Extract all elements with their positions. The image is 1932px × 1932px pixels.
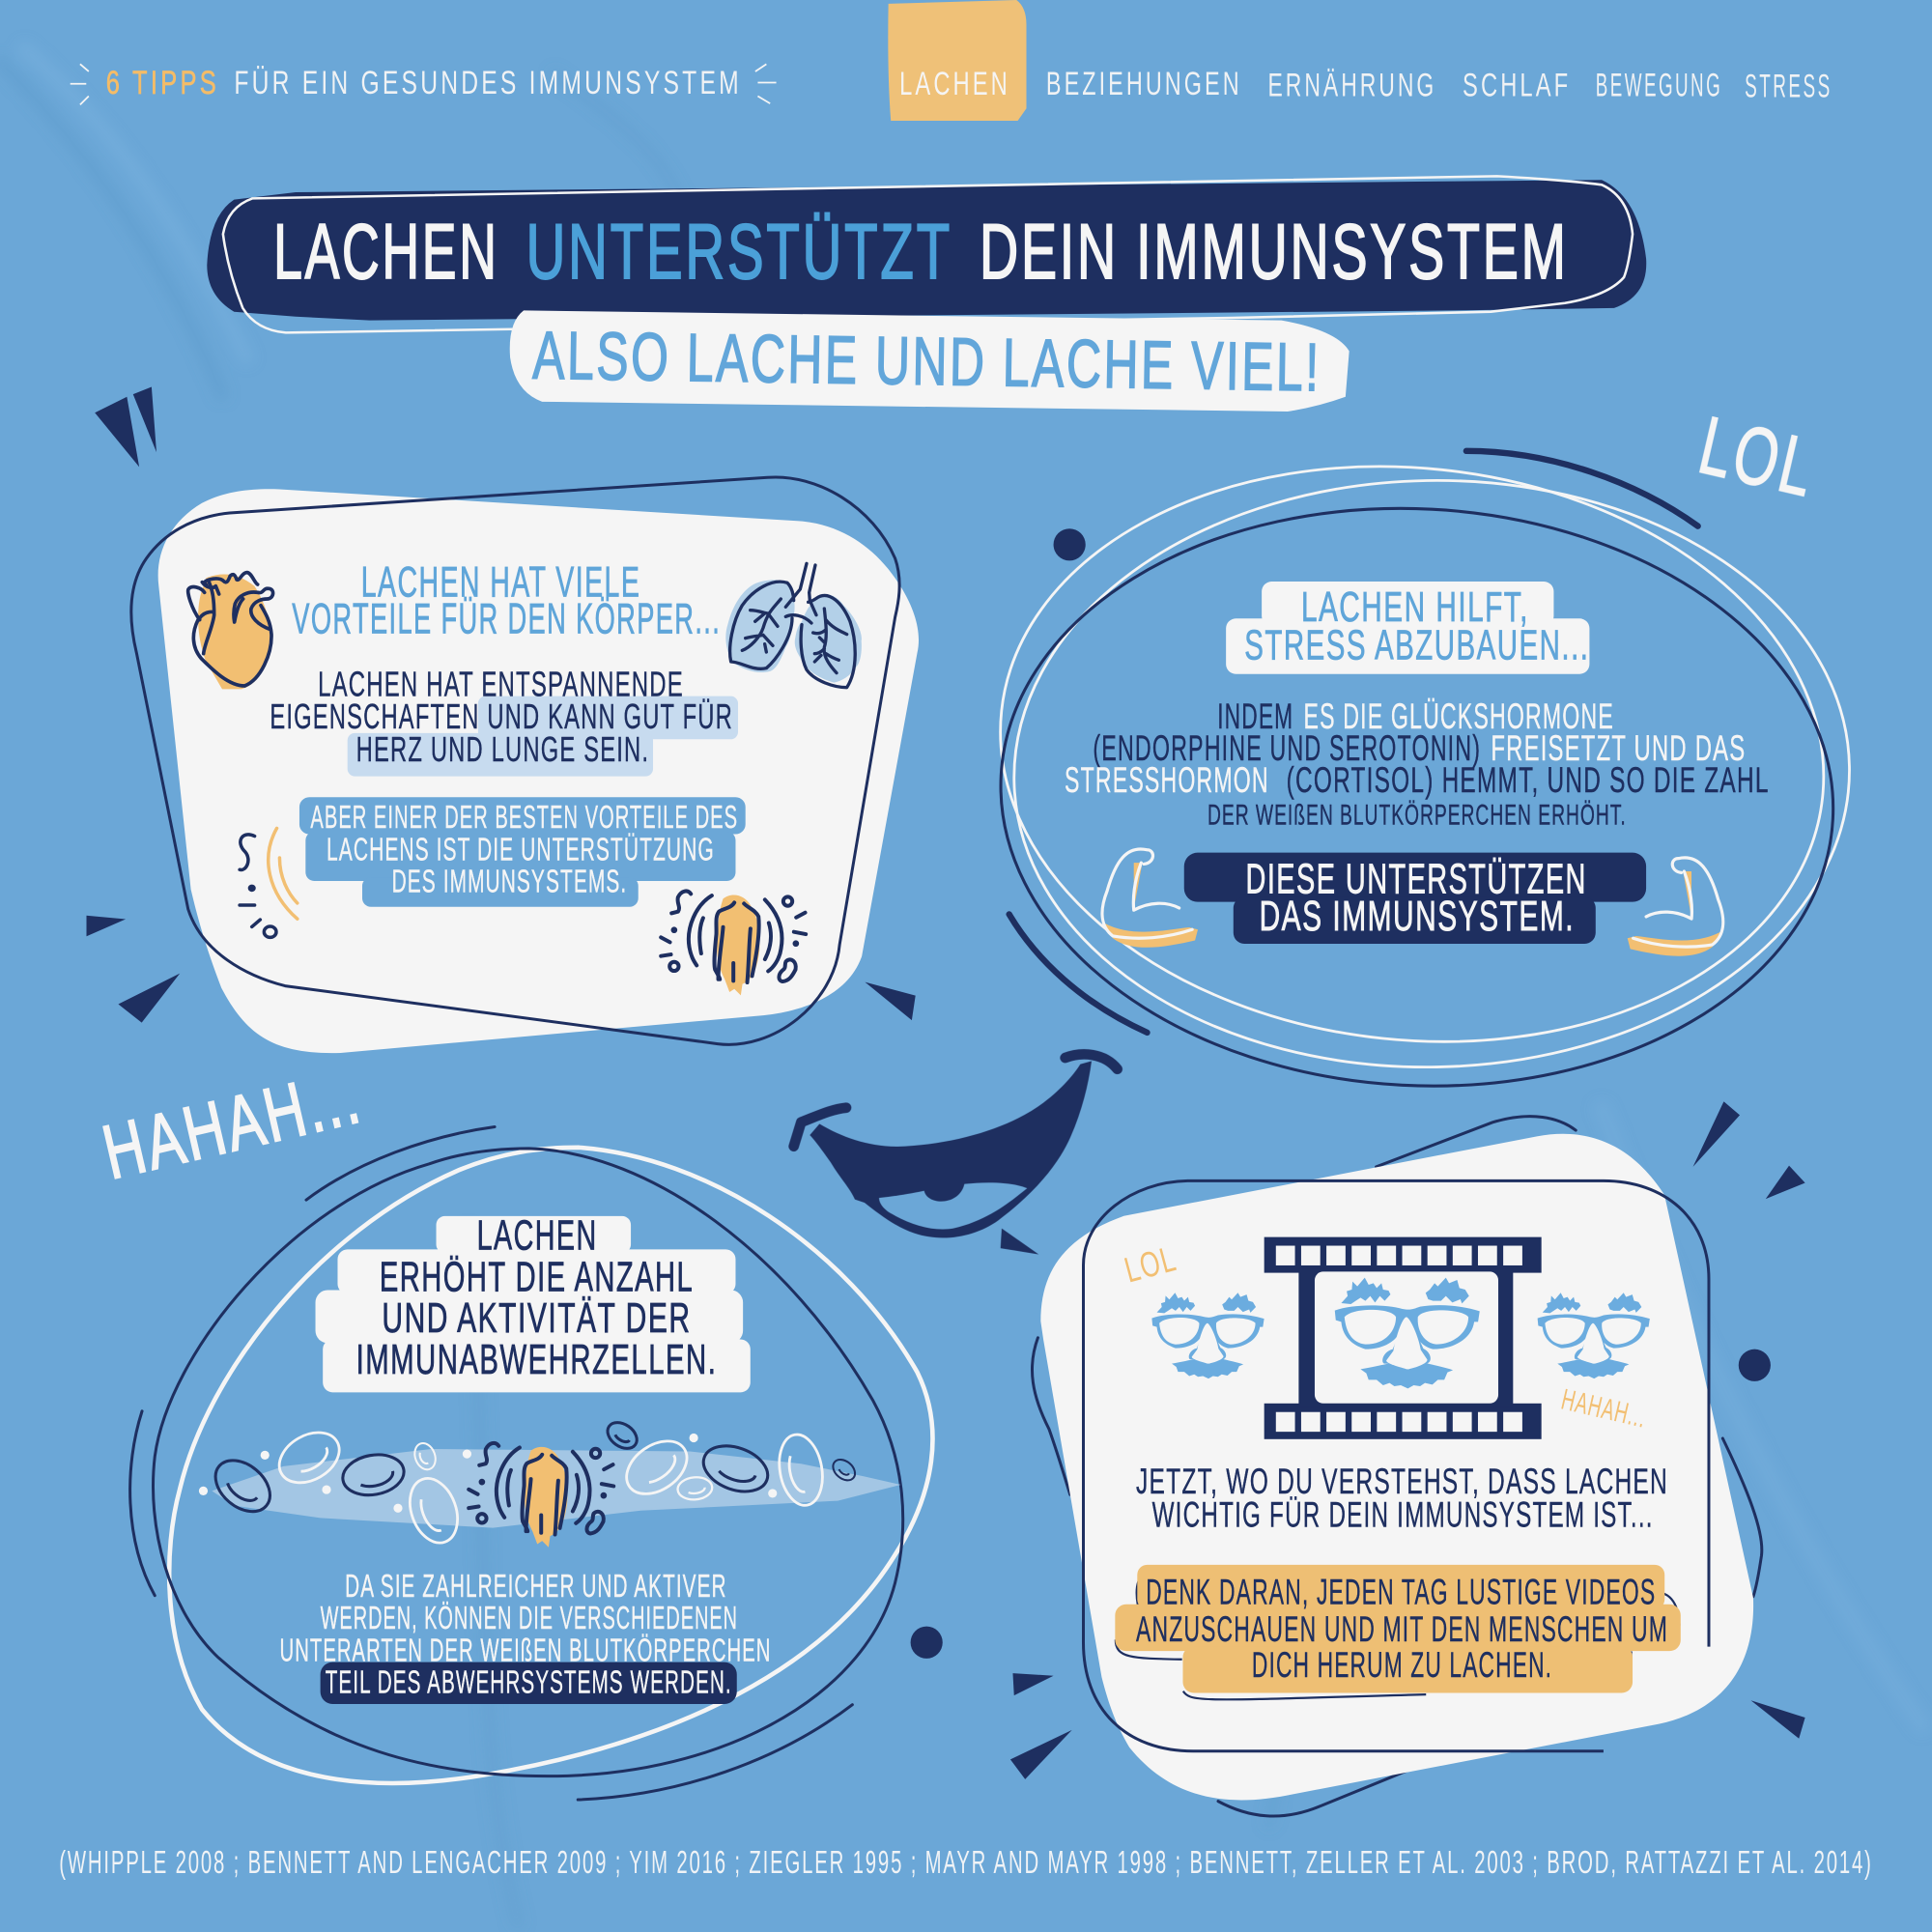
body text: FREISETZT UND DAS [1491,728,1746,768]
callout: remember: DICH HERUM ZU LACHEN. [1252,1645,1552,1685]
subtitle [510,310,1350,412]
panel: funny videos [1032,1117,1762,1816]
callout: these support [1184,853,1646,944]
title banner: LACHEN [273,209,499,296]
word: LOL: LOL [1691,399,1825,514]
body text [280,1569,771,1701]
navigation tabs: BEZIEHUNGEN [1046,66,1242,102]
callout: immune support: ABER EINER DER BESTEN VORTEILE DES [310,800,738,836]
header: 6 tipps title [71,64,777,104]
body text: WERDEN, KÖNNEN DIE VERSCHIEDENEN [321,1601,738,1636]
dot [911,1627,943,1659]
word: HAHAH: HAHAH... [96,1053,369,1195]
body text: STRESSHORMON [1065,760,1269,800]
navigation tabs: LACHEN [899,66,1010,102]
heading: VORTEILE FÜR DEN KÖRPER... [292,596,721,643]
body text: EIGENSCHAFTEN UND KANN GUT FÜR [270,697,733,736]
callout: immune support: DES IMMUNSYSTEMS. [392,864,627,899]
icon: shaking figure [469,1443,613,1548]
icon: smiling mouth [794,1054,1118,1237]
title banner: DEIN IMMUNSYSTEM [980,209,1569,296]
accents around panel four [1010,1101,1805,1779]
heading label: ERHÖHT DIE ANZAHL [380,1255,694,1301]
heading label: LACHEN HILFT, [1301,584,1529,631]
body text: WICHTIG FÜR DEIN IMMUNSYSTEM IST... [1152,1494,1654,1534]
heading label [1226,582,1589,674]
subtitle: ALSO LACHE UND LACHE VIEL! [532,317,1321,405]
panel shape [131,477,919,1053]
icon: funny glasses centre [1335,1278,1480,1388]
heading label: STRESS ABZUBAUEN... [1244,622,1589,668]
accent triangles top left [95,387,156,467]
panel shape [1040,1134,1753,1800]
heading: LACHEN HAT VIELE [361,558,640,606]
body text: UNTERARTEN DER WEIßEN BLUTKÖRPERCHEN [280,1633,771,1668]
icon: funny glasses right [1538,1293,1650,1378]
highlight: light blue [348,696,738,777]
heading label [316,1212,751,1392]
body text: ES DIE GLÜCKSHORMONE [1303,696,1614,736]
navigation tabs: BEWEGUNG [1596,67,1722,103]
body text [270,666,733,769]
ellipse outlines [972,427,1855,1107]
body text: HERZ UND LUNGE SEIN. [356,730,649,769]
navigation tabs [888,0,1833,121]
icon: lungs [725,563,862,688]
title banner [207,176,1646,332]
icon: shaking figure [661,891,806,995]
icon: flexed arm left [1102,849,1198,948]
body text [1065,696,1770,831]
icon: sound arcs left [240,828,298,937]
word: lol orange: LOL [1121,1238,1180,1291]
heading [292,558,721,643]
body text: INDEM [1217,696,1293,736]
navigation tabs: STRESS [1745,69,1833,105]
body text: JETZT, WO DU VERSTEHST, DASS LACHEN [1136,1462,1668,1501]
heading label: LACHEN [477,1212,598,1259]
active tab [888,0,1026,121]
body text: (ENDORPHINE UND SEROTONIN) [1093,728,1481,768]
icon: flexed arm right [1628,858,1723,956]
panel: body benefits [131,477,919,1053]
header: 6 tipps title: FÜR EIN GESUNDES IMMUNSYSTEM [234,65,742,101]
callout: immune support [299,797,746,907]
icon: film strip [1264,1237,1542,1439]
callout: immune support: LACHENS IST DIE UNTERSTÜTZUNG [327,832,715,867]
body text [1136,1462,1668,1534]
burst marks [71,64,777,104]
accent triangle below mouth [1001,1229,1038,1254]
icon: heart [188,573,273,689]
icon: funny glasses left [1151,1293,1264,1378]
body text: DA SIE ZAHLREICHER UND AKTIVER [345,1569,727,1605]
brush stroke [212,1449,900,1528]
header: 6 tipps title: 6 TIPPS [106,65,219,101]
circle outlines [130,1127,932,1800]
callout: remember [1115,1565,1681,1699]
word: hahah orange: HAHAH... [1558,1383,1650,1435]
body text: DER WEIßEN BLUTKÖRPERCHEN ERHÖHT. [1208,799,1627,831]
body text: LACHEN HAT ENTSPANNENDE [318,666,684,704]
panel: immune cells [130,1127,943,1800]
navy highlight [321,1662,737,1704]
panel: stress reduction [972,427,1855,1107]
callout: these support: DAS IMMUNSYSTEM. [1260,894,1575,940]
accent triangles panel one [86,916,916,1023]
back outlines [1032,1117,1762,1816]
blood cells illustration [199,1417,900,1549]
navigation tabs: ERNÄHRUNG [1267,67,1436,103]
dot [1054,528,1086,560]
heading label: UND AKTIVITÄT DER [382,1295,692,1342]
title banner: UNTERSTÜTZT [526,209,952,296]
navigation tabs: SCHLAF [1463,67,1571,103]
callout: these support: DIESE UNTERSTÜTZEN [1246,857,1587,903]
body text: TEIL DES ABWEHRSYSTEMS WERDEN. [326,1665,732,1701]
heading label: IMMUNABWEHRZELLEN. [356,1337,717,1383]
